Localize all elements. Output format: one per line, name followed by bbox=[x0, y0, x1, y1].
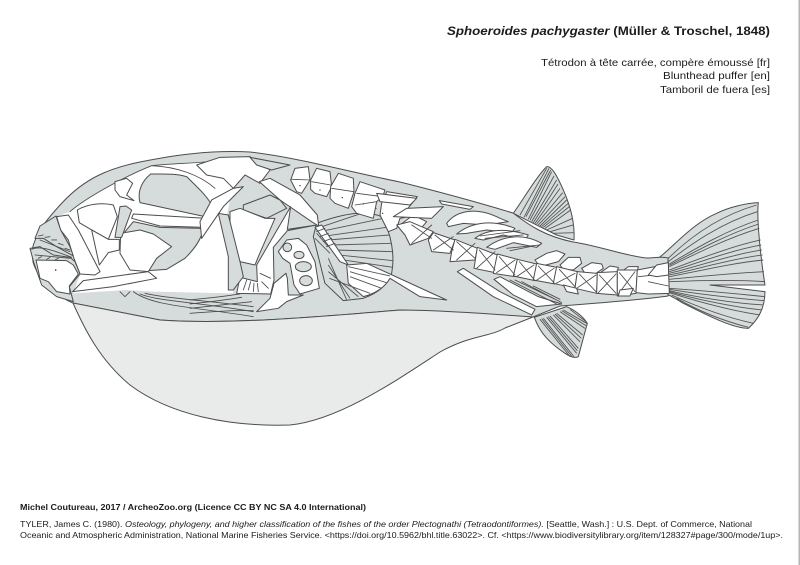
common names: Tamboril de fuera [es] bbox=[660, 85, 770, 96]
gray vertical strip bbox=[218, 213, 243, 290]
spine: pectoral ray bar bbox=[315, 225, 348, 265]
pectoral fan bbox=[313, 213, 393, 301]
neural spines bbox=[377, 193, 542, 251]
upper shoulder bones bbox=[197, 157, 270, 188]
vertebra 4 bbox=[352, 182, 385, 218]
lower beak teeth bbox=[32, 248, 72, 260]
gray strip bbox=[115, 206, 132, 237]
title: Sphoeroides pachygaster (Müller & Troschel, 1848) bbox=[447, 24, 770, 38]
orbit bbox=[139, 174, 213, 217]
jaw muscle strips bbox=[190, 294, 253, 313]
fan rays bbox=[315, 208, 393, 300]
head bones bbox=[30, 160, 253, 317]
lower muscle strips bbox=[120, 292, 253, 317]
round bone cluster bbox=[278, 238, 319, 294]
tail plate bbox=[648, 263, 669, 277]
band bbox=[250, 157, 290, 170]
round bone holes bbox=[283, 243, 312, 286]
reference text: TYLER, James C. (1980). Osteology, phylogeny, and higher classification of the fishes of the order Plectognathi (Tetraodontiformes). [Seattle, Wash.] : U.S. Dept. of Commerce, National bbox=[20, 519, 752, 529]
vertebral column bbox=[377, 193, 669, 315]
common names: Blunthead puffer [en] bbox=[663, 71, 770, 82]
page edge bbox=[798, 0, 800, 565]
triangular bone bbox=[230, 208, 275, 265]
anal fin bbox=[534, 307, 587, 357]
vertebra 2 bbox=[311, 168, 332, 197]
vertebra 3 bbox=[330, 173, 354, 208]
bone: lower jaw wedge bbox=[73, 272, 157, 292]
body bbox=[32, 152, 668, 321]
reference text bbox=[20, 519, 783, 540]
cleithrum bbox=[259, 178, 319, 226]
bone: preopercle bbox=[120, 230, 172, 272]
bone: frontal piece bbox=[115, 178, 134, 201]
vertebra 6 bbox=[400, 215, 427, 245]
common names: Tétrodon à tête carrée, compère émoussé [fr] bbox=[541, 58, 770, 69]
gray patch bbox=[243, 195, 287, 218]
centra bbox=[397, 222, 669, 296]
vertebra 5 bbox=[380, 192, 417, 232]
credit line: Michel Coutureau, 2017 / ArcheoZoo.org (Licence CC BY NC SA 4.0 International) bbox=[20, 502, 366, 512]
bone: maxilla bbox=[57, 215, 100, 275]
dorsal fin bbox=[513, 167, 574, 240]
upper beak teeth bbox=[35, 216, 73, 256]
caudal fin bbox=[658, 203, 765, 328]
reference text: Oceanic and Atmospheric Administration, National Marine Fisheries Service. <https://doi.org/10.5962/bhl.title.63022>. Cf. <https://www.biodiversitylibrary.org/item/128327#page/300/mode/1up>. bbox=[20, 530, 783, 540]
scapular branch bbox=[200, 187, 243, 238]
lower jaw bbox=[30, 247, 80, 302]
upper rounded spines bbox=[535, 251, 638, 277]
shoulder and pectoral bones bbox=[190, 157, 447, 313]
skull interior bbox=[57, 160, 233, 293]
opercular band bbox=[132, 214, 207, 227]
vertebra 1 bbox=[291, 167, 310, 193]
coracoid bbox=[237, 207, 317, 294]
belly bbox=[73, 303, 533, 425]
haemal spine wedges bbox=[457, 268, 633, 315]
fish skeleton illustration bbox=[30, 152, 765, 425]
lower orbit gray bbox=[125, 222, 203, 271]
common names bbox=[541, 58, 770, 96]
bone: preorbital bbox=[77, 204, 117, 239]
pelvic bone bbox=[257, 273, 303, 312]
white pectoral wedge bbox=[347, 263, 447, 300]
gill rods bbox=[243, 273, 271, 292]
bone: connecting bbox=[92, 230, 119, 265]
cranial roof line bbox=[70, 160, 227, 212]
